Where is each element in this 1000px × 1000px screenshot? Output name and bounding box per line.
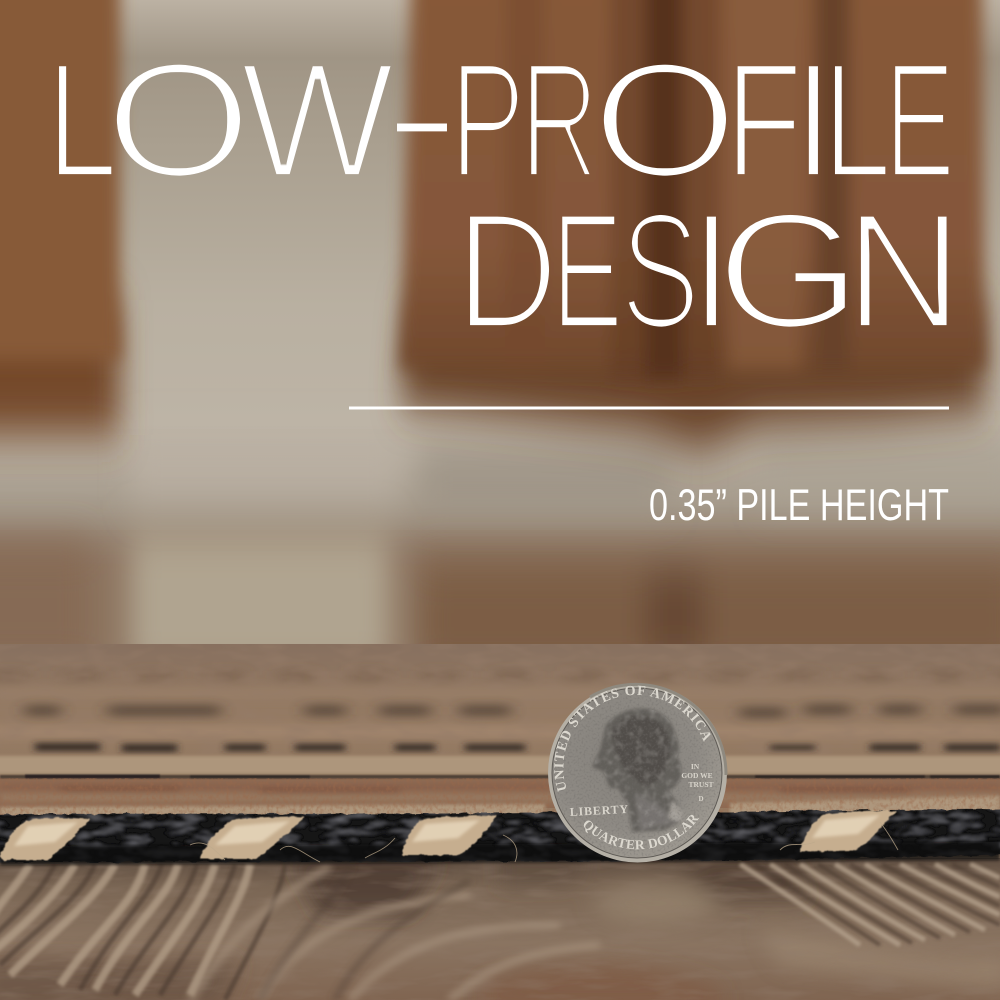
title: low-profile design: P xyxy=(450,29,526,212)
coin: quarter dollar: D xyxy=(698,795,704,803)
right curtain xyxy=(400,300,985,450)
pale edge of rug body xyxy=(0,803,546,816)
background: blurred room xyxy=(0,0,1000,710)
wall and door opening xyxy=(0,0,1000,530)
rug braided edge xyxy=(0,809,1000,865)
title: low-profile design: L xyxy=(822,29,892,212)
title: low-profile design: L xyxy=(46,29,118,212)
dark row pattern two xyxy=(35,743,1000,752)
title: low-profile design: O xyxy=(592,29,738,212)
sweeping grain centre xyxy=(190,866,600,1000)
title: low-profile design: D xyxy=(456,179,558,363)
rug surface xyxy=(0,644,1000,865)
title: low-profile design: I xyxy=(792,29,834,212)
wood floor xyxy=(0,858,1000,1000)
wood streak noise xyxy=(0,858,1000,1000)
coin: quarter dollar: TRUST xyxy=(688,780,714,789)
title: low-profile design: O xyxy=(105,29,252,212)
shadow under braid xyxy=(0,842,1000,865)
coin: quarter dollar xyxy=(548,683,728,862)
title: low-profile design: E xyxy=(884,29,956,212)
black braid xyxy=(0,809,1000,862)
coin: quarter dollar: IN xyxy=(691,762,700,771)
portrait xyxy=(592,708,684,832)
floor behind the rug xyxy=(0,480,1000,710)
wood grain left xyxy=(0,864,250,995)
coin: quarter dollar: GOD WE xyxy=(681,771,713,780)
title: low-profile design: S xyxy=(620,179,700,363)
coin: quarter dollar: LIBERTY xyxy=(569,802,629,819)
divider rule xyxy=(349,406,949,410)
coin grain xyxy=(553,689,721,857)
coin: quarter dollar: QUARTER DOLLAR xyxy=(584,814,699,850)
coin lettering: UNITED STATES OF AMERICA xyxy=(554,686,711,792)
title: low-profile design xyxy=(46,23,962,363)
title: low-profile design: I xyxy=(690,179,732,363)
red-brown stripe xyxy=(0,778,1000,808)
title: low-profile design: N xyxy=(845,179,962,363)
rug texture xyxy=(0,778,1000,818)
highlights on cream segments xyxy=(14,815,880,846)
title: low-profile design: E xyxy=(551,179,624,363)
cream segments xyxy=(0,811,897,860)
left curtain xyxy=(0,300,120,435)
title: low-profile design: G xyxy=(716,179,861,363)
title: low-profile design: W xyxy=(240,29,395,212)
diagonal grain right xyxy=(740,864,1000,945)
blurred rug rows xyxy=(0,676,1000,738)
loose fibres xyxy=(190,822,898,862)
beige stripe xyxy=(0,756,1000,774)
thin black line xyxy=(0,774,1000,778)
grey patch under right curtain xyxy=(130,440,1000,505)
title: low-profile design: R xyxy=(520,29,599,212)
far rug mottling xyxy=(0,644,1000,754)
dark row pattern one xyxy=(25,705,1000,717)
title: low-profile design: - xyxy=(384,23,460,206)
floor reflection xyxy=(0,530,1000,680)
broad tonal areas xyxy=(0,858,1000,1000)
title: low-profile design: F xyxy=(725,29,803,212)
